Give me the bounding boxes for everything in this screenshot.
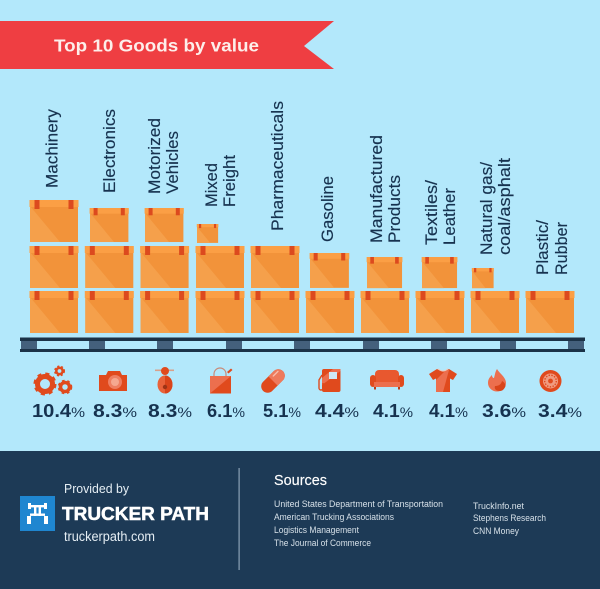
column: Textiles/Leather bbox=[416, 257, 464, 333]
pallet bbox=[20, 338, 585, 352]
icon: camera bbox=[99, 371, 127, 391]
column: Natural gas/coal/asphalt bbox=[470, 268, 520, 333]
category labels: Manufactured bbox=[368, 135, 386, 243]
title banner bbox=[0, 21, 334, 69]
percentage values bbox=[32, 401, 582, 421]
percentage values: 8.3 % bbox=[93, 401, 137, 421]
percentage values: 8.3 % bbox=[148, 401, 192, 421]
sources block: American Trucking Associations bbox=[274, 512, 394, 522]
category labels: Freight bbox=[221, 155, 239, 207]
title banner: Top 10 Goods by value bbox=[54, 36, 259, 56]
percentage values: 4.4 % bbox=[315, 401, 359, 421]
percentage values: 4.1% bbox=[373, 401, 413, 421]
category labels: Pharmaceuticals bbox=[269, 101, 287, 231]
stacked boxes bbox=[30, 200, 574, 333]
category labels: Electronics bbox=[101, 109, 119, 193]
category labels: Rubber bbox=[553, 222, 571, 275]
category labels: Products bbox=[386, 175, 404, 243]
footer panel bbox=[0, 451, 600, 589]
category labels: Natural gas/ bbox=[478, 162, 496, 255]
column: Gasoline bbox=[306, 253, 354, 333]
percentage values: 6.1% bbox=[207, 401, 245, 421]
column: Plastic/Rubber bbox=[526, 291, 574, 333]
sources block: CNN Money bbox=[473, 526, 519, 536]
provider block bbox=[20, 481, 209, 544]
icon: gears bbox=[35, 366, 71, 394]
percentage values: 3.4 % bbox=[538, 401, 582, 421]
provider block: truckerpath.com bbox=[64, 529, 155, 544]
category labels: Machinery bbox=[44, 108, 62, 188]
icon: fuel pump bbox=[319, 369, 340, 392]
sources block: Sources bbox=[274, 472, 327, 489]
sources block bbox=[274, 472, 546, 548]
category labels: Vehicles bbox=[164, 131, 182, 194]
column: Pharmaceuticals bbox=[250, 246, 300, 333]
icon: shopping bag bbox=[210, 368, 232, 394]
provider block: TRUCKER PATH bbox=[62, 503, 209, 524]
category labels: Textiles/ bbox=[423, 180, 441, 245]
icon: scooter bbox=[155, 367, 174, 394]
column: Electronics bbox=[85, 208, 134, 333]
icon: flame bbox=[488, 369, 506, 392]
percentage values: 10.4 % bbox=[32, 401, 85, 421]
sources block: Stephens Research bbox=[473, 513, 546, 523]
sources block: United States Department of Transportation bbox=[274, 499, 443, 509]
percentage values: 5.1% bbox=[263, 401, 301, 421]
percentage values: 3.6 % bbox=[482, 401, 526, 421]
category labels: Leather bbox=[441, 187, 459, 245]
column: Mixed Freight bbox=[196, 224, 244, 333]
icon: pill bbox=[259, 367, 287, 395]
icon: tire bbox=[540, 370, 562, 392]
sources block: TruckInfo.net bbox=[473, 501, 524, 511]
column: Manufactured Products bbox=[360, 257, 410, 333]
category labels: Plastic/ bbox=[534, 220, 552, 275]
category labels: Gasoline bbox=[319, 176, 337, 242]
provider block: Provided by bbox=[64, 481, 129, 496]
category labels: Mixed bbox=[203, 163, 221, 207]
icon: t-shirt bbox=[429, 369, 457, 392]
icon: Trucker Path logo bbox=[20, 496, 55, 531]
sources block: The Journal of Commerce bbox=[274, 538, 371, 548]
column: Motorized Vehicles bbox=[140, 208, 189, 333]
icon: sofa bbox=[370, 370, 404, 390]
column: Machinery bbox=[30, 200, 78, 333]
category labels bbox=[44, 101, 571, 275]
category labels: Motorized bbox=[146, 118, 164, 194]
percentage values: 4.1% bbox=[429, 401, 468, 421]
sources block: Logistics Management bbox=[274, 525, 359, 535]
category labels: coal/asphalt bbox=[496, 158, 514, 255]
